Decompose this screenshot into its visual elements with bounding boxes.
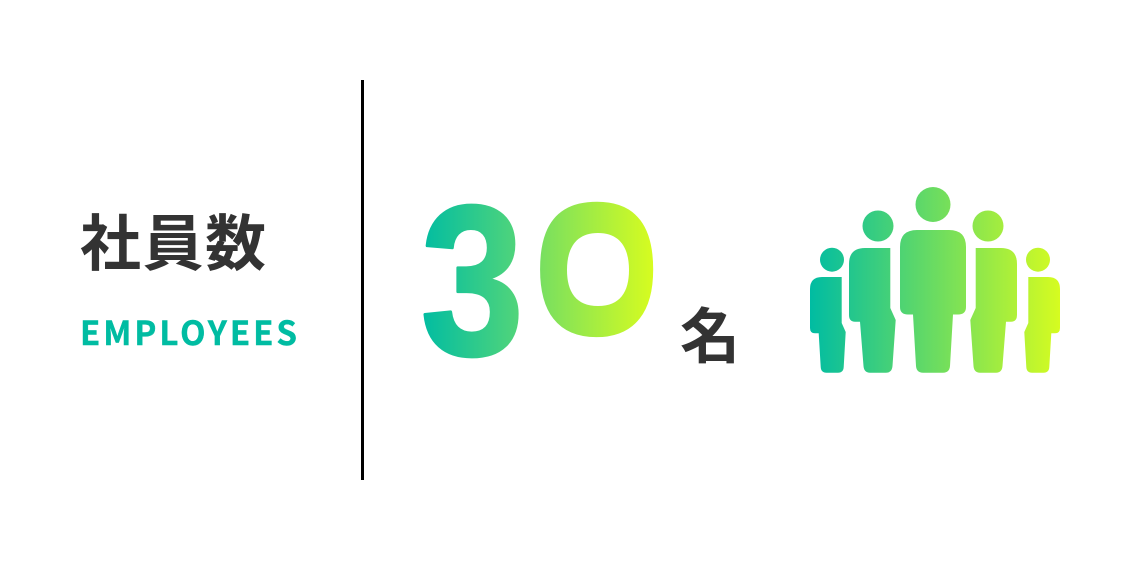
person: inner right bbox=[970, 210, 1017, 373]
person: centre bbox=[900, 187, 966, 373]
vertical divider bbox=[361, 80, 364, 480]
heading: 社員数: 社員数 bbox=[80, 194, 266, 283]
subheading: EMPLOYEES: EMPLOYEES bbox=[80, 307, 297, 355]
person: inner left bbox=[849, 210, 896, 373]
person: far left bbox=[810, 248, 846, 373]
icon: group of five people bbox=[810, 187, 1060, 373]
number: 30 bbox=[420, 160, 653, 400]
unit: 名: 名 bbox=[680, 289, 740, 376]
person: far right bbox=[1024, 248, 1060, 373]
digit 0: 0 bbox=[541, 175, 653, 365]
digit 3: 3 bbox=[420, 160, 524, 400]
